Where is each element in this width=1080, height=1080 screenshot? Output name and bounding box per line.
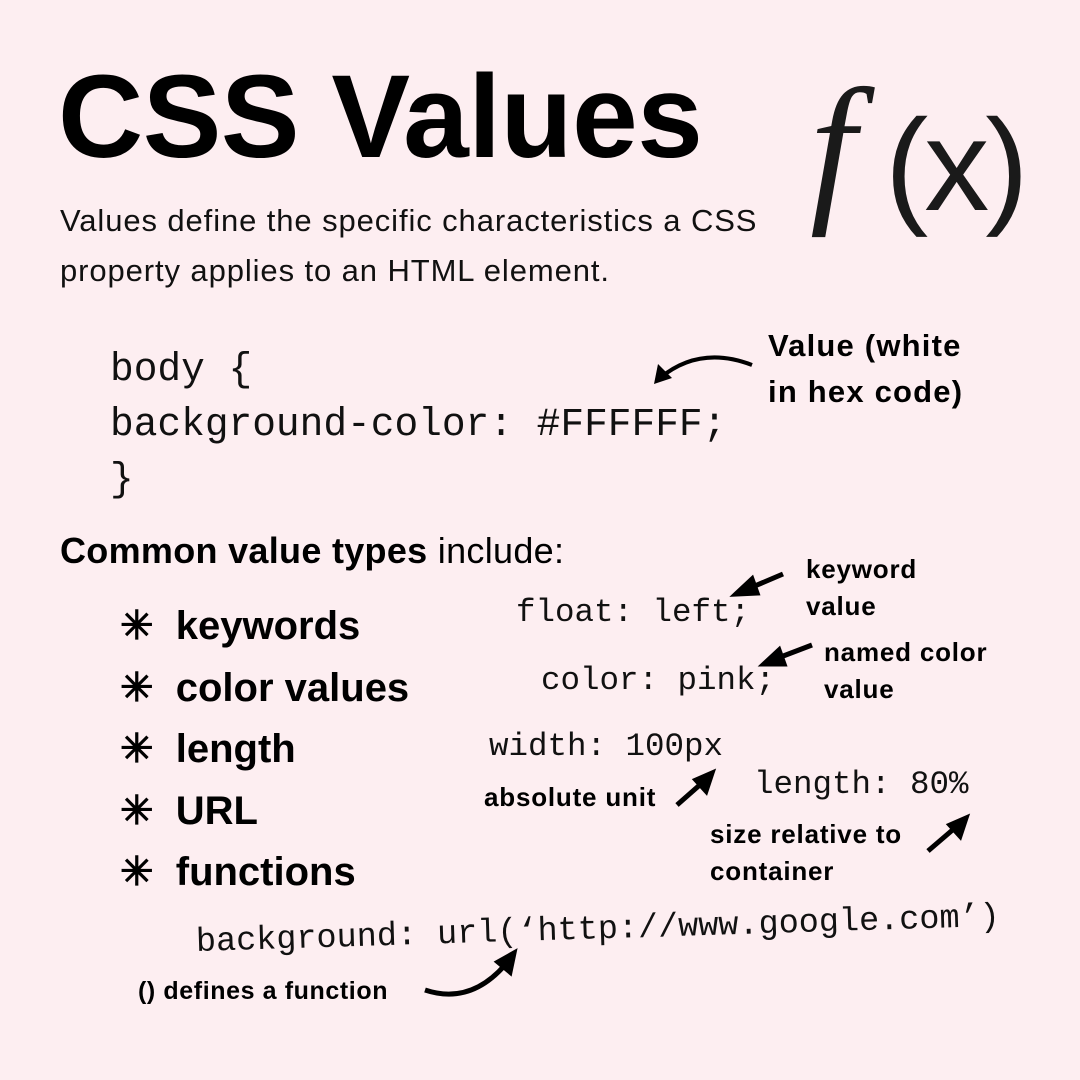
code: float: float: left; <box>516 594 750 631</box>
subtitle <box>60 203 757 288</box>
code: color: color: pink; <box>541 662 775 699</box>
label: keyword value: keyword <box>806 554 917 584</box>
label: keyword value: value <box>806 591 876 621</box>
label: absolute unit: absolute unit <box>484 782 656 812</box>
arrow: curved to value <box>654 355 753 384</box>
code: background url: background: url(‘http://www.google.com’) <box>195 899 1000 962</box>
icon: f(x): f <box>810 60 875 238</box>
list of value types: ✳ keywords <box>120 604 360 648</box>
icon: f(x): (x) <box>885 92 1025 238</box>
label: named color value: named color <box>824 637 987 667</box>
code block: background-color: #FFFFFF; <box>110 402 726 447</box>
subtitle: Values define the specific characteristics a CSS <box>60 203 757 238</box>
icon: f(x) <box>810 60 1025 238</box>
code block: } <box>110 457 134 502</box>
list of value types: ✳ color values <box>120 666 409 710</box>
title: CSS Values <box>58 51 702 183</box>
list of value types: ✳ functions <box>120 850 356 894</box>
code: width: width: 100px <box>489 728 723 765</box>
list of value types: ✳ URL <box>120 788 258 832</box>
label: keyword value <box>806 554 917 621</box>
label: function: () defines a function <box>138 977 388 1005</box>
label: named color value: value <box>824 674 894 704</box>
callout: value label: Value (white <box>768 328 962 363</box>
callout: value label <box>768 328 963 409</box>
label: size relative <box>710 819 902 886</box>
label: size relative: size relative to <box>710 819 902 849</box>
code block: body { <box>110 347 252 392</box>
list of value types <box>120 604 409 894</box>
label: size relative: container <box>710 856 834 886</box>
subtitle: property applies to an HTML element. <box>60 253 610 288</box>
heading: common value types: Common value types include: <box>60 530 564 571</box>
label: named color value <box>824 637 987 704</box>
list of value types: ✳ length <box>120 727 296 771</box>
callout: value label: in hex code) <box>768 374 963 409</box>
code block <box>110 347 726 502</box>
code: length: length: 80% <box>754 766 969 803</box>
